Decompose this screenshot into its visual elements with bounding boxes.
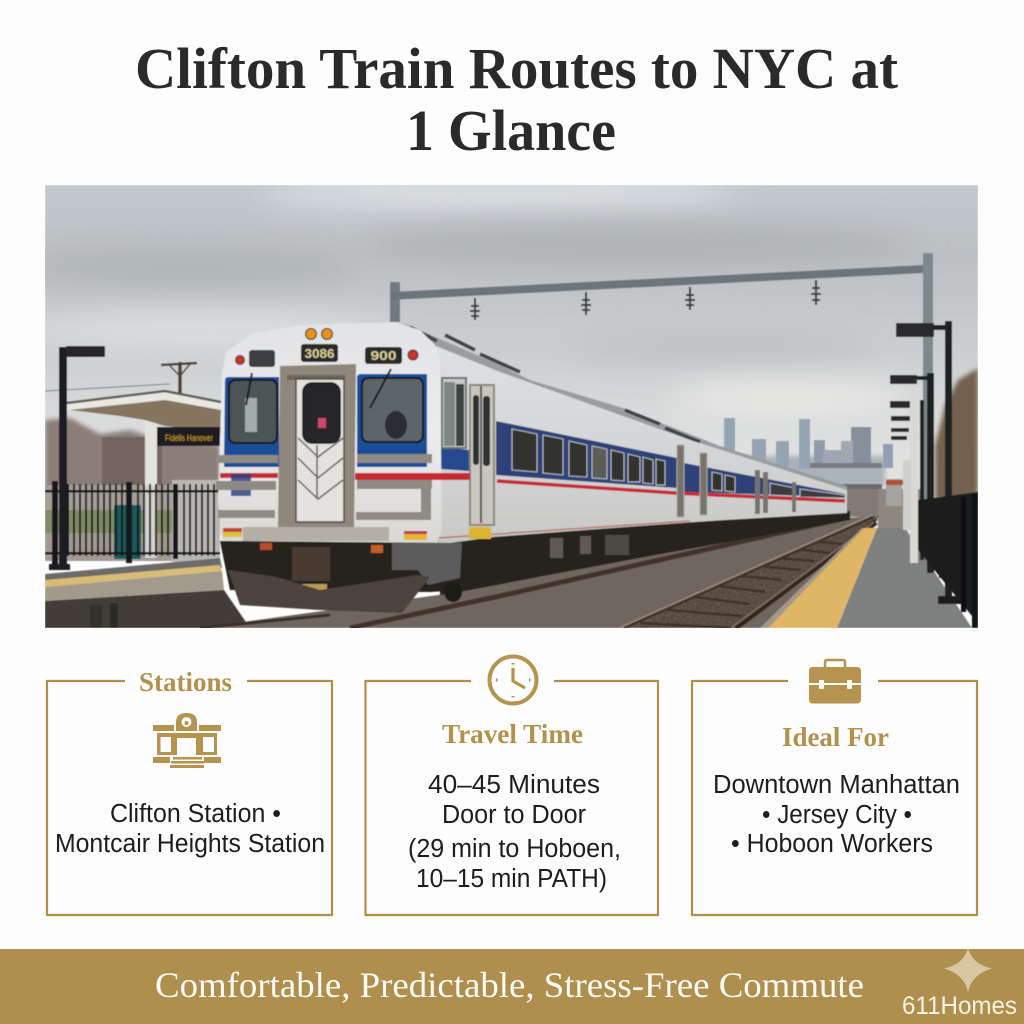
blue window surrounds [224, 369, 427, 467]
gravel track bed [200, 516, 880, 628]
title [135, 36, 899, 163]
text: travel time details: 10–15 min PATH) [416, 865, 607, 893]
text: ideal for list: • Jersey City • [762, 801, 912, 829]
cab destination signs [249, 344, 402, 367]
background trees and building on left [45, 418, 220, 562]
coupler area and plow [220, 541, 462, 613]
heading: ideal for: Ideal For [782, 722, 889, 752]
footer tagline: Comfortable, Predictable, Stress-Free Commute [155, 965, 864, 1005]
side window near cab [441, 378, 469, 471]
heading: travel time: Travel Time [442, 719, 583, 749]
near track under train [200, 517, 850, 628]
icon: sparkle logo [944, 948, 992, 992]
side lower pinstripe [438, 521, 690, 538]
station shelter with sign [67, 391, 221, 558]
title: Clifton Train Routes to NYC at [135, 36, 899, 101]
right side lamp posts [890, 321, 952, 601]
text: station names [55, 800, 325, 858]
text: ideal for list [713, 771, 960, 858]
text: travel time details [408, 771, 621, 893]
side body [436, 346, 847, 545]
door frame and door [278, 364, 356, 528]
right fence [918, 492, 978, 628]
cab lights [236, 328, 418, 364]
overhead signal gantry [390, 253, 933, 503]
train [216, 322, 850, 613]
text: ideal for list: Downtown Manhattan [713, 771, 960, 799]
icon: clock [490, 656, 536, 704]
side doors [469, 385, 796, 539]
text: ideal for list: • Hoboon Workers [731, 830, 933, 858]
sky with clouds [20, 176, 978, 535]
side windows [512, 429, 845, 498]
roof [403, 323, 847, 491]
heading: stations: Stations [139, 667, 232, 697]
photo: commuter train at station platform [20, 176, 978, 628]
red stripes and grab bars [216, 454, 470, 520]
left platform [45, 558, 250, 628]
left lamp post [49, 346, 105, 570]
logo text: 611Homes [902, 992, 1017, 1020]
cab destination signs: 900 [370, 348, 396, 363]
right side bare trees [935, 368, 978, 500]
red stripe [496, 478, 846, 504]
icon: briefcase [809, 660, 861, 704]
text: travel time details: (29 min to Hoboen, [408, 835, 621, 863]
station shelter with sign: Fidelis Hanover [165, 433, 213, 443]
text: station names: Montcair Heights Station [55, 830, 325, 858]
panel: ideal for [692, 660, 977, 915]
white platform pillar [886, 388, 918, 563]
right platform [760, 528, 972, 628]
footer banner [0, 948, 1024, 1024]
foreground track with ties [620, 515, 878, 628]
utility pole [45, 362, 197, 395]
teal trash can [114, 505, 141, 559]
yellow tactile strip [768, 528, 877, 628]
left fence [45, 481, 220, 569]
icon: station building [153, 713, 221, 768]
bumper and yellow plates [223, 527, 427, 541]
distant NYC skyline [724, 418, 920, 529]
text: station names: Clifton Station • [110, 800, 281, 828]
text: travel time details: Door to Door [442, 801, 586, 829]
panel: travel time [366, 656, 658, 915]
blue window band [496, 421, 677, 488]
undercarriage side [440, 511, 850, 595]
cab destination signs: 3086 [304, 346, 334, 361]
text: travel time details: 40–45 Minutes [428, 771, 600, 799]
front face [218, 322, 442, 545]
panel: stations [47, 667, 332, 915]
title: 1 Glance [406, 98, 616, 163]
